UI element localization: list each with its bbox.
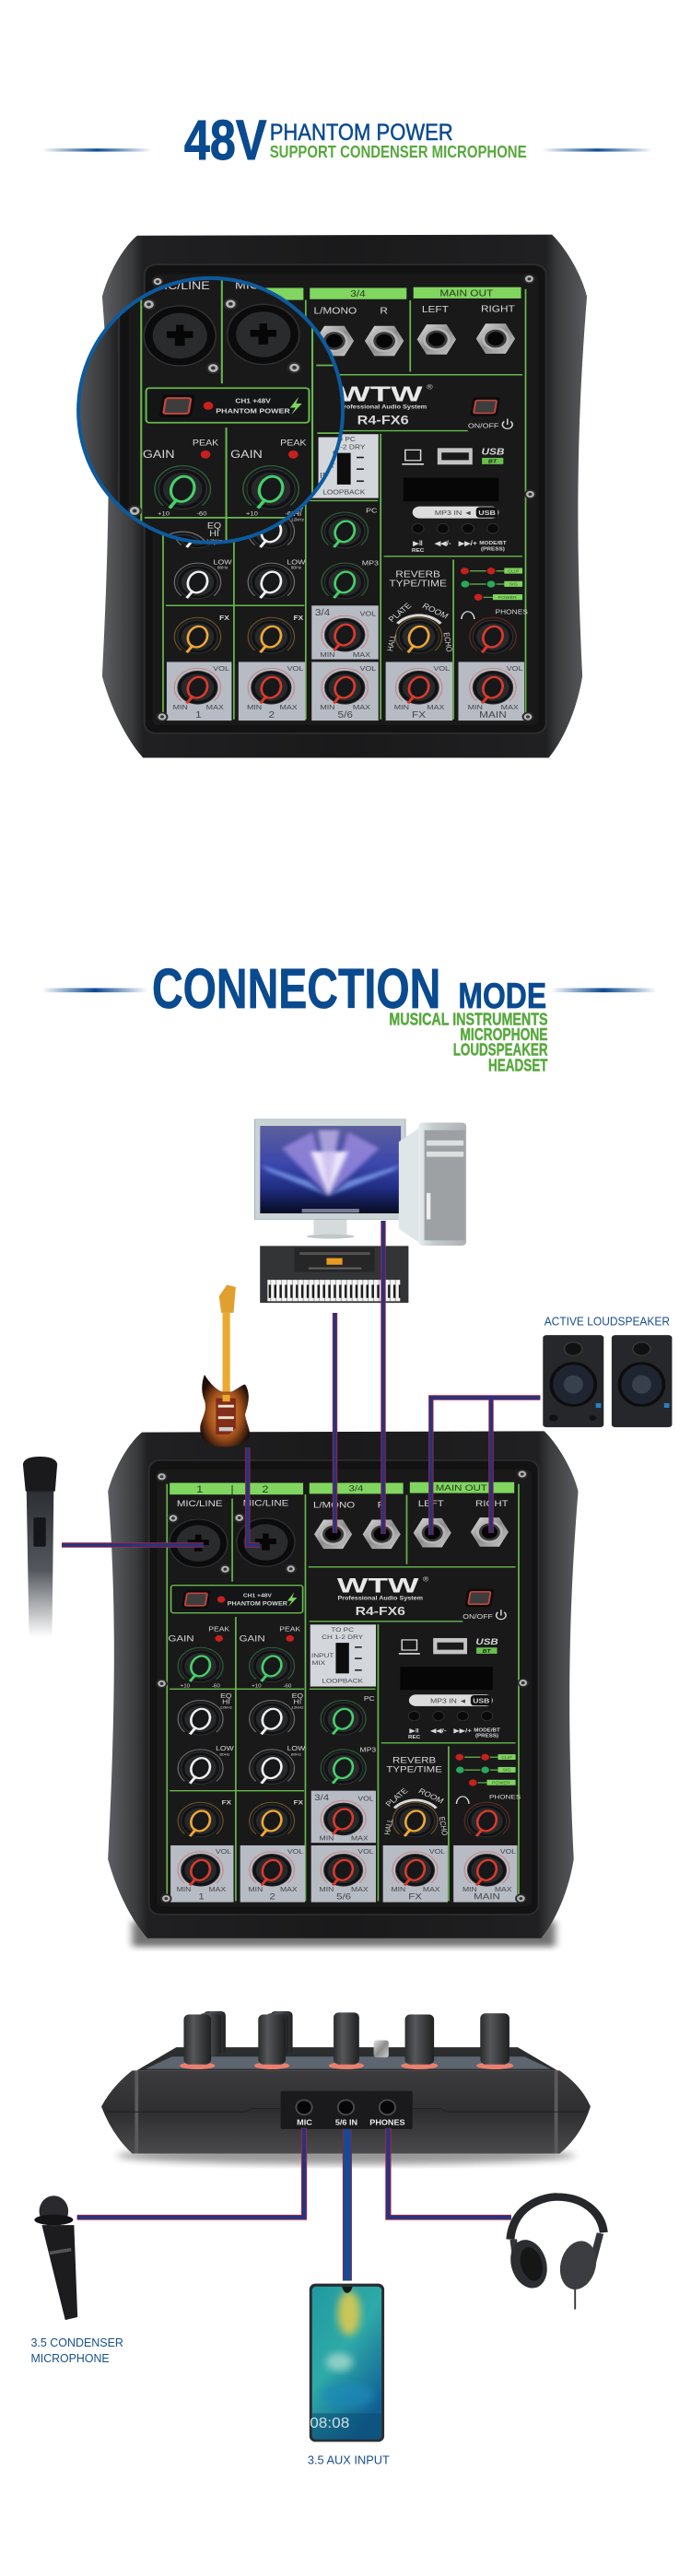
input labels [177, 1498, 509, 1510]
magnifier lens over channel inputs [76, 276, 345, 544]
USB and Bluetooth module: USB [475, 1637, 498, 1647]
grey volume strips: VOL [429, 1848, 446, 1856]
decorative title rule left [41, 148, 152, 152]
channel header bars: 2 [262, 1483, 269, 1495]
channel header bars: 3/4 [348, 1484, 364, 1493]
title: connection mode [41, 957, 657, 1075]
USB and Bluetooth module: BT [483, 1648, 492, 1655]
title: 48V phantom power: PHANTOM POWER [270, 120, 453, 146]
reverb section: ROOM [416, 1786, 446, 1805]
grey volume strips [170, 1791, 518, 1903]
EQ knobs: 12kHz [220, 1705, 232, 1710]
grey volume strips: FX [408, 1891, 422, 1902]
USB and Bluetooth module: (PRESS) [475, 1734, 498, 1739]
grey volume strips: MAIN [474, 1891, 500, 1902]
icon: handheld microphone left [23, 1457, 57, 1637]
USB and Bluetooth module: MP3 IN ◄ [430, 1697, 467, 1704]
title: 48V phantom power: SUPPORT CONDENSER MICROPHONE [270, 142, 527, 161]
green section lines [167, 1484, 519, 1901]
brand logo and model [337, 1575, 506, 1621]
EQ knobs: 80Hz [291, 1752, 301, 1756]
reverb section: ECHO [437, 1816, 450, 1836]
mixer photo: top view with phantom power [102, 235, 587, 758]
grey volume strips: 3/4 [314, 1793, 329, 1803]
grey volume strips: MAX [423, 1885, 440, 1893]
icon: condenser microphone [34, 2195, 77, 2320]
status LEDs [456, 1754, 516, 1786]
input labels: R [378, 1500, 385, 1510]
loopback switch panel: CH 1-2 DRY [322, 1633, 363, 1641]
FX send knobs [178, 1798, 303, 1837]
EQ knobs: EQ [220, 1692, 232, 1700]
mixer photo: connection diagram [108, 1431, 579, 1947]
mixer casing [108, 1431, 579, 1938]
icon: tower computer [399, 1122, 466, 1246]
loopback switch panel: LOOPBACK [322, 1677, 363, 1684]
label: 3.5 condenser microphone [30, 2336, 123, 2365]
mixer artwork [108, 1431, 579, 1938]
grey volume strips: MIN [320, 1885, 334, 1893]
status LEDs: POWER [492, 1781, 510, 1786]
mixer front view [101, 2011, 591, 2164]
EQ knobs: 12kHz [291, 1705, 304, 1710]
grey volume strips: MIN [320, 1834, 334, 1842]
grey volume strips: VOL [357, 1795, 374, 1803]
input labels: L/MONO [313, 1500, 355, 1510]
EQ knobs: 80Hz [219, 1752, 230, 1756]
gain section: +10 [181, 1684, 190, 1689]
status LEDs: SIG [503, 1768, 511, 1773]
phones knob [457, 1793, 521, 1837]
USB and Bluetooth module: USB [473, 1697, 490, 1704]
brand logo and model: ON/OFF [463, 1613, 493, 1621]
input labels: RIGHT [475, 1499, 509, 1509]
icon: music keyboard [260, 1246, 408, 1303]
phantom power switch box: PHANTOM POWER [228, 1601, 287, 1607]
EQ knobs [178, 1692, 306, 1785]
cables: input and output connections [62, 1221, 540, 1545]
phantom power switch box [171, 1586, 303, 1613]
EQ knobs: HI [222, 1698, 230, 1705]
PC and MP3 knobs [321, 1695, 377, 1785]
USB and Bluetooth module: ▶▶/+ [452, 1727, 473, 1734]
gain section: +10 [252, 1684, 262, 1689]
EQ knobs: LOW [216, 1745, 234, 1752]
status LEDs: CLIP [501, 1755, 512, 1761]
USB and Bluetooth module: REC [408, 1735, 420, 1740]
title: 48V phantom power: 48V [184, 109, 266, 171]
grey volume strips: MAX [208, 1885, 227, 1893]
icon: monitor [254, 1119, 405, 1239]
grey volume strips: VOL [216, 1848, 232, 1856]
title: connection mode: MODE [458, 975, 546, 1015]
USB and Bluetooth module [399, 1637, 500, 1740]
reverb section: HALL [382, 1818, 395, 1835]
6.35 jack outputs [314, 1517, 509, 1549]
PC and MP3 knobs: PC [364, 1695, 375, 1703]
title: connection mode: HEADSET [488, 1056, 548, 1075]
gain section: PEAK [279, 1625, 301, 1633]
FX send knobs: FX [294, 1798, 303, 1806]
grey volume strips: VOL [500, 1848, 517, 1856]
grey volume strips: MIN [392, 1885, 406, 1893]
USB and Bluetooth module: MODE/BT [474, 1728, 500, 1733]
grey volume strips: MAX [351, 1885, 369, 1893]
title: connection mode: LOUDSPEAKER [453, 1039, 548, 1060]
icon: headphones [505, 2197, 603, 2310]
panel screws [156, 1469, 529, 1903]
mixer drop shadow [132, 1921, 556, 1947]
phantom power switch box: CH1 +48V [243, 1593, 273, 1598]
grey volume strips: 1 [198, 1891, 205, 1902]
label: 3.5 condenser microphone: MICROPHONE [30, 2351, 110, 2365]
side view section [30, 2011, 603, 2466]
grey volume strips: MIN [463, 1885, 477, 1893]
grey volume strips: MAX [280, 1885, 298, 1893]
icon: smartphone [310, 2284, 384, 2441]
loopback switch panel: MIX [312, 1659, 325, 1667]
reverb section [382, 1755, 450, 1837]
loopback switch panel [310, 1624, 376, 1687]
EQ knobs: EQ [292, 1692, 303, 1700]
gain section [169, 1625, 301, 1689]
loopback switch panel: INPUT [311, 1652, 334, 1659]
grey volume strips: MAX [351, 1834, 369, 1842]
brand logo and model: Professional Audio System [337, 1596, 423, 1601]
EQ knobs: LOW [287, 1745, 306, 1752]
icon: studio speakers [543, 1335, 672, 1427]
PC and MP3 knobs: MP3 [360, 1746, 377, 1753]
grey volume strips: 2 [269, 1891, 275, 1902]
XLR combo inputs [168, 1513, 297, 1574]
grey volume strips: MIN [177, 1885, 192, 1893]
input labels: MIC/LINE [243, 1498, 288, 1508]
FX send knobs: FX [222, 1798, 231, 1806]
gain section: PEAK [208, 1625, 230, 1633]
phones knob: PHONES [489, 1793, 521, 1801]
channel header bars: 1 [196, 1483, 203, 1495]
icon: smartphone: 08:08 [310, 2414, 349, 2431]
gain section: -60 [212, 1684, 220, 1689]
gain section: GAIN [169, 1633, 194, 1644]
input labels: MIC/LINE [177, 1499, 223, 1509]
brand logo and model: R4-FX6 [356, 1605, 405, 1619]
computer and keyboard sources [200, 1119, 672, 1446]
mixer front view: 5/6 IN [335, 2118, 357, 2126]
reverb section: PLATE [383, 1786, 410, 1809]
reverb section: TYPE/TIME [386, 1764, 442, 1774]
EQ knobs: HI [294, 1698, 301, 1705]
grey volume strips: 5/6 [336, 1891, 351, 1902]
icon: electric guitar [200, 1284, 250, 1446]
title: connection mode: CONNECTION [152, 957, 440, 1021]
cables: front panel connections [77, 2128, 511, 2281]
grey volume strips: VOL [357, 1848, 374, 1856]
input labels: LEFT [418, 1499, 444, 1509]
grey volume strips: MIN [249, 1885, 264, 1893]
USB and Bluetooth module: ◀◀/- [429, 1727, 447, 1734]
brand logo and model: ® [423, 1575, 428, 1583]
brand logo and model: WTW [337, 1575, 420, 1598]
channel header bars: MAIN OUT [436, 1483, 487, 1493]
grey volume strips: MAX [495, 1885, 512, 1893]
label: 3.5 condenser microphone: 3.5 CONDENSER [30, 2336, 123, 2349]
reverb section: REVERB [392, 1755, 436, 1765]
label: 3.5 aux input: 3.5 AUX INPUT [308, 2453, 390, 2466]
gain section: -60 [283, 1684, 291, 1689]
loopback switch panel: TO PC [331, 1626, 355, 1633]
mixer front view: PHONES [369, 2118, 405, 2126]
title: 48V phantom power [41, 109, 652, 171]
channel header bars: | [230, 1483, 234, 1495]
grey volume strips: VOL [287, 1848, 304, 1856]
USB and Bluetooth module: ▶‖ [408, 1727, 419, 1734]
title: connection mode: MUSICAL INSTRUMENTS [389, 1010, 548, 1029]
gain section: GAIN [240, 1633, 265, 1644]
title: connection mode: MICROPHONE [460, 1025, 548, 1044]
mixer front view: MIC [297, 2118, 313, 2126]
channel header bars [170, 1482, 514, 1495]
